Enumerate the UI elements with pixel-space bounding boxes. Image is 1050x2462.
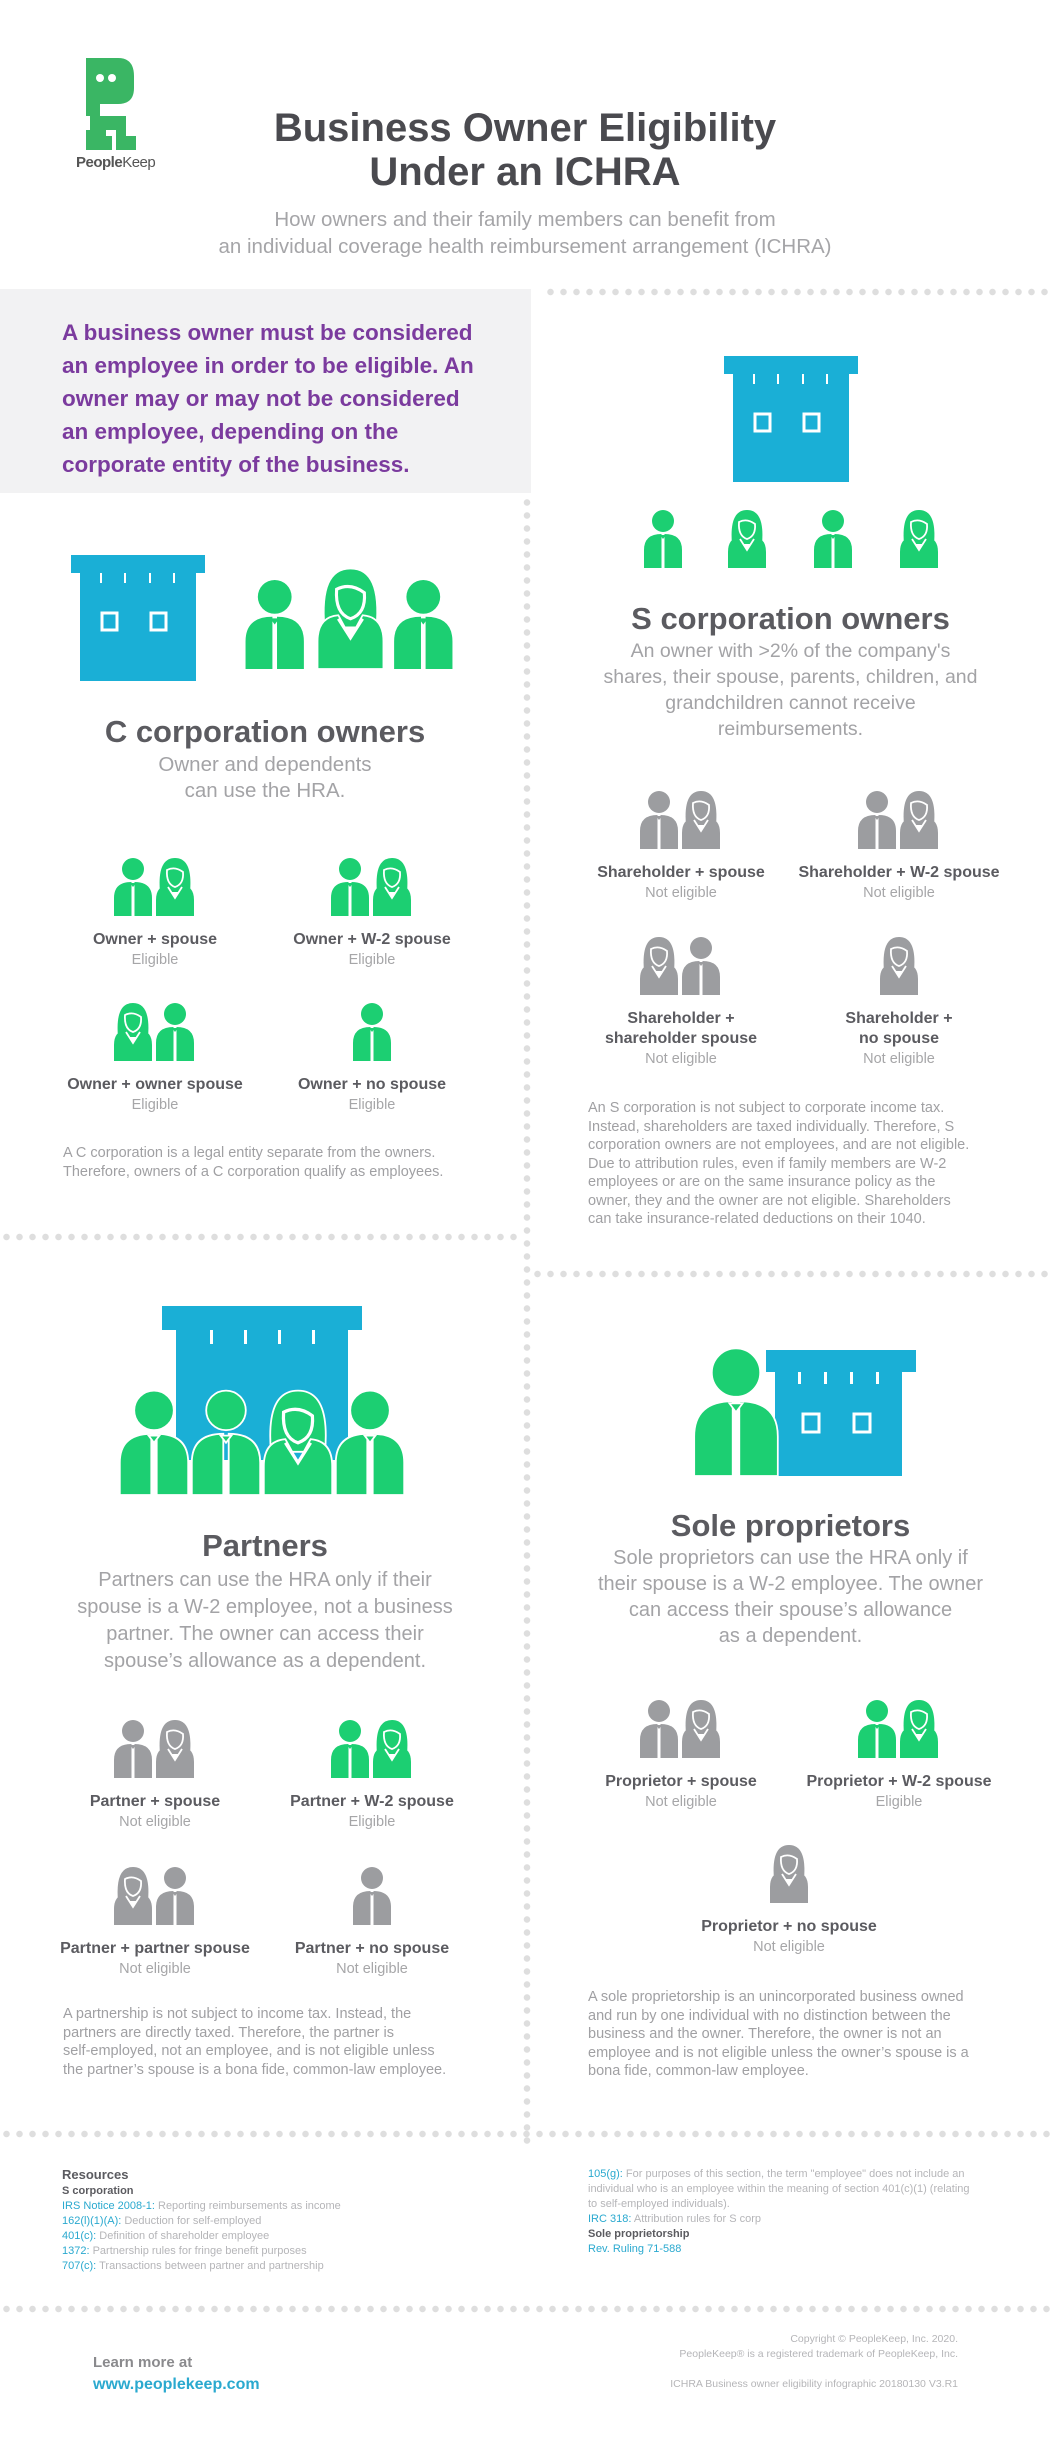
- subtitle: How owners and their family members can benefit from: [274, 208, 776, 231]
- paragraph: [63, 2006, 446, 2078]
- subheading: can use the HRA.: [185, 779, 345, 802]
- paragraph: bona fide, common-law employee.: [588, 2063, 809, 2079]
- subheading: as a dependent.: [719, 1625, 862, 1647]
- paragraph: can take insurance-related deductions on their 1040.: [588, 1211, 926, 1227]
- resources: left column: IRS Notice 2008-1: Reporting reimbursements as income: [62, 2200, 341, 2212]
- pair: partner + spouse: Partner + spouse: [90, 1793, 220, 1810]
- panel: Partners: [60, 1306, 454, 2078]
- heading: S corporation owners: [631, 601, 950, 636]
- pair: owner + owner spouse: Owner + owner spouse: [67, 1076, 243, 1093]
- footer: copyright: [670, 2333, 958, 2390]
- footer: learn more: www.peoplekeep.com: [93, 2376, 260, 2393]
- single: owner + no spouse: [298, 1003, 446, 1113]
- subheading: spouse’s allowance as a dependent.: [104, 1650, 426, 1672]
- paragraph: business and the owner. Therefore, the owner is not an: [588, 2026, 942, 2042]
- paragraph: Due to attribution rules, even if family members are W-2: [588, 1156, 946, 1172]
- intro callout box: an employee, depending on the: [62, 419, 398, 444]
- title: Business Owner Eligibility: [274, 106, 776, 150]
- heading: Partners: [202, 1528, 328, 1563]
- pair: proprietor + W-2 spouse: Proprietor + W-2 spouse: [806, 1773, 992, 1790]
- resources: left column: Resources: [62, 2167, 128, 2182]
- subheading: shares, their spouse, parents, children, and: [604, 666, 977, 688]
- paragraph: the partner’s spouse is a bona fide, common-law employee.: [63, 2062, 446, 2078]
- pair: shareholder + W-2 spouse: Shareholder + W-2 spouse: [798, 864, 1000, 881]
- single: shareholder + no spouse: Not eligible: [863, 1051, 935, 1067]
- single: proprietor + no spouse: Not eligible: [753, 1939, 825, 1955]
- pair: owner + spouse: [93, 858, 217, 968]
- pair: partner + partner spouse: [60, 1867, 250, 1977]
- resources: left column: S corporation: [62, 2185, 134, 2197]
- paragraph: An S corporation is not subject to corporate income tax.: [588, 1100, 944, 1116]
- subheading: [604, 640, 977, 740]
- title: Under an ICHRA: [369, 150, 681, 194]
- pair: partner + partner spouse: Not eligible: [119, 1961, 191, 1977]
- pair: partner + spouse: [90, 1720, 220, 1830]
- resources: left column: 1372: Partnership rules for fringe benefit purposes: [62, 2245, 307, 2257]
- heading: Sole proprietors: [671, 1508, 910, 1543]
- footer: learn more: [93, 2354, 260, 2393]
- subheading: [158, 753, 372, 802]
- panel: Sole proprietors: [588, 1349, 992, 2079]
- single: shareholder + no spouse: [845, 937, 953, 1067]
- subtitle: [218, 208, 832, 258]
- subheading: spouse is a W-2 employee, not a business: [77, 1596, 453, 1618]
- pair: shareholder + spouse: Shareholder + spouse: [597, 864, 765, 881]
- subheading: partner. The owner can access their: [106, 1623, 424, 1645]
- heading: C corporation owners: [105, 714, 425, 749]
- resources: left column: 162(l)(1)(A): Deduction for self-employed: [62, 2215, 261, 2227]
- subheading: [598, 1547, 983, 1647]
- resources: right column: Sole proprietorship: [588, 2228, 689, 2240]
- pair: proprietor + W-2 spouse: Eligible: [876, 1794, 922, 1810]
- logo: PeopleKeep: PeopleKeep: [76, 154, 155, 171]
- intro callout box: corporate entity of the business.: [62, 452, 410, 477]
- subheading: reimbursements.: [718, 718, 863, 740]
- pair: proprietor + spouse: [605, 1700, 757, 1810]
- pair: partner + W-2 spouse: Eligible: [349, 1814, 395, 1830]
- paragraph: [588, 1989, 969, 2079]
- pair: shareholder + W-2 spouse: [798, 791, 1000, 901]
- footer: copyright: ICHRA Business owner eligibility infographic 20180130 V3.R1: [670, 2378, 958, 2390]
- paragraph: [63, 1145, 443, 1180]
- subheading: grandchildren cannot receive: [665, 692, 916, 714]
- pair: owner + owner spouse: [67, 1003, 243, 1113]
- paragraph: Instead, shareholders are taxed individually. Therefore, S: [588, 1118, 954, 1134]
- pair: shareholder + spouse: Not eligible: [645, 885, 717, 901]
- subheading: Sole proprietors can use the HRA only if: [613, 1547, 968, 1569]
- logo: PeopleKeep: [76, 58, 156, 171]
- single: owner + no spouse: Owner + no spouse: [298, 1076, 446, 1093]
- pair: shareholder + spouse: [597, 791, 765, 901]
- pair: shareholder + W-2 spouse: Not eligible: [863, 885, 935, 901]
- pair: owner + spouse: Owner + spouse: [93, 931, 217, 948]
- footer: copyright: PeopleKeep® is a registered trademark of PeopleKeep, Inc.: [679, 2348, 958, 2360]
- resources: left column: [62, 2167, 341, 2272]
- pair: shareholder + shareholder spouse: shareholder spouse: [605, 1030, 757, 1047]
- pair: partner + W-2 spouse: [290, 1720, 454, 1830]
- single: partner + no spouse: Not eligible: [336, 1961, 408, 1977]
- subheading: An owner with >2% of the company's: [631, 640, 950, 662]
- icon: four people: [644, 510, 938, 568]
- icon: owner and building: [695, 1349, 916, 1476]
- paragraph: A sole proprietorship is an unincorporated business owned: [588, 1989, 964, 2005]
- footer: learn more: Learn more at: [93, 2354, 192, 2371]
- pair: owner + W-2 spouse: Owner + W-2 spouse: [293, 931, 451, 948]
- pair: owner + W-2 spouse: [293, 858, 451, 968]
- subheading: Owner and dependents: [158, 753, 372, 776]
- intro callout box: owner may or may not be considered: [62, 386, 460, 411]
- paragraph: corporation owners are not employees, and are not eligible.: [588, 1137, 969, 1153]
- resources: right column: IRC 318: Attribution rules for S corp: [588, 2213, 761, 2225]
- resources: right column: individual who is an employee within the meaning of section 401(c)(1) (relating: [588, 2183, 970, 2195]
- subheading: [77, 1569, 453, 1672]
- pair: partner + partner spouse: Partner + partner spouse: [60, 1940, 250, 1957]
- subtitle: an individual coverage health reimbursement arrangement (ICHRA): [218, 235, 832, 258]
- pair: shareholder + shareholder spouse: Not eligible: [645, 1051, 717, 1067]
- paragraph: A C corporation is a legal entity separate from the owners.: [63, 1145, 435, 1161]
- intro callout box: A business owner must be considered: [62, 320, 473, 345]
- icon: building with four partners: [120, 1306, 404, 1494]
- pair: owner + W-2 spouse: Eligible: [349, 952, 395, 968]
- single: shareholder + no spouse: Shareholder +: [845, 1010, 953, 1027]
- subheading: can access their spouse’s allowance: [629, 1599, 952, 1621]
- subheading: Partners can use the HRA only if their: [98, 1569, 432, 1591]
- paragraph: employees or are on the same insurance policy as the: [588, 1174, 935, 1190]
- pair: proprietor + W-2 spouse: [806, 1700, 992, 1810]
- pair: partner + spouse: Not eligible: [119, 1814, 191, 1830]
- icon: building: [724, 356, 858, 482]
- single: partner + no spouse: [295, 1867, 449, 1977]
- resources: left column: 401(c): Definition of shareholder employee: [62, 2230, 269, 2242]
- pair: partner + W-2 spouse: Partner + W-2 spouse: [290, 1793, 454, 1810]
- paragraph: Therefore, owners of a C corporation qualify as employees.: [63, 1164, 443, 1180]
- paragraph: partners are directly taxed. Therefore, the partner is: [63, 2024, 394, 2040]
- single: shareholder + no spouse: no spouse: [859, 1030, 939, 1047]
- paragraph: and run by one individual with no distinction between the: [588, 2008, 951, 2024]
- resources: right column: Rev. Ruling 71-588: [588, 2243, 681, 2255]
- resources: left column: 707(c): Transactions between partner and partnership: [62, 2260, 324, 2272]
- title: [274, 106, 776, 194]
- single: partner + no spouse: Partner + no spouse: [295, 1940, 449, 1957]
- resources: right column: [588, 2168, 970, 2255]
- paragraph: employee and is not eligible unless the owner’s spouse is a: [588, 2044, 969, 2060]
- paragraph: A partnership is not subject to income tax. Instead, the: [63, 2006, 411, 2022]
- pair: shareholder + shareholder spouse: [605, 937, 757, 1067]
- icon: building and group: [71, 555, 452, 681]
- panel: S corporation owners: [588, 356, 1000, 1227]
- paragraph: [588, 1100, 969, 1227]
- pair: owner + spouse: Eligible: [132, 952, 178, 968]
- pair: proprietor + spouse: Proprietor + spouse: [605, 1773, 757, 1790]
- footer: copyright: Copyright © PeopleKeep, Inc. 2020.: [790, 2333, 958, 2345]
- resources: right column: 105(g): For purposes of this section, the term "employee" does not include an: [588, 2168, 965, 2180]
- resources: right column: to self-employed individuals).: [588, 2198, 730, 2210]
- paragraph: self-employed, not an employee, and is not eligible unless: [63, 2043, 435, 2059]
- subheading: their spouse is a W-2 employee. The owner: [598, 1573, 983, 1595]
- single: owner + no spouse: Eligible: [349, 1097, 395, 1113]
- intro callout box: [0, 289, 531, 493]
- panel: C corporation owners: [63, 555, 452, 1180]
- single: proprietor + no spouse: Proprietor + no spouse: [701, 1918, 877, 1935]
- pair: shareholder + shareholder spouse: Shareholder +: [627, 1010, 735, 1027]
- paragraph: owner, they and the owner are not eligible. Shareholders: [588, 1192, 951, 1208]
- pair: proprietor + spouse: Not eligible: [645, 1794, 717, 1810]
- intro callout box: an employee in order to be eligible. An: [62, 353, 474, 378]
- pair: owner + owner spouse: Eligible: [132, 1097, 178, 1113]
- single: proprietor + no spouse: [701, 1845, 877, 1955]
